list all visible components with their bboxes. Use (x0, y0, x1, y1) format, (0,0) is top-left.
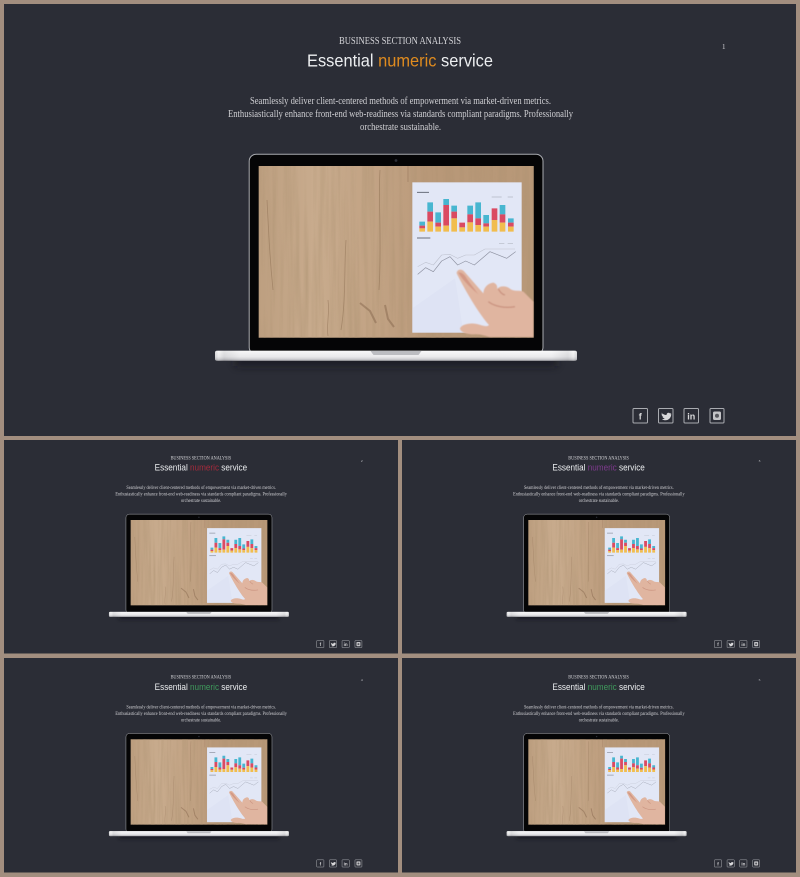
text block: description: orchestrate sustainable. (579, 718, 619, 723)
text block: description: Enthusiastically enhance front-end web-readiness via standards compliant paradigms. Professionally (115, 712, 287, 717)
heading: section label: BUSINESS SECTION ANALYSIS (568, 456, 629, 461)
text block: description (513, 705, 685, 723)
text block: description: Enthusiastically enhance front-end web-readiness via standards compliant paradigms. Professionally (115, 493, 287, 498)
bar chart (419, 199, 514, 232)
text block: description (115, 705, 287, 723)
page number: 3 (759, 459, 761, 463)
icon: linkedin: in (687, 412, 695, 422)
text block: description (115, 486, 287, 504)
page number: 1 (722, 43, 726, 51)
icon: twitter (658, 408, 673, 423)
panel: slide 2 (4, 440, 398, 654)
title: Essential numeric service (155, 463, 247, 473)
laptop mockup (109, 733, 289, 839)
text block: description: Enthusiastically enhance front-end web-readiness via standards compliant paradigms. Professionally (513, 712, 685, 717)
laptop mockup (507, 514, 687, 619)
camera (395, 159, 397, 162)
laptop base (215, 351, 577, 361)
laptop mockup (215, 154, 577, 366)
text block: description: Seamlessly deliver client-centered methods of empowerment via market-driven metrics. (524, 705, 674, 710)
heading: section label: BUSINESS SECTION ANALYSIS (171, 676, 231, 681)
text block: description: Seamlessly deliver client-centered methods of empowerment via market-driven metrics. (250, 96, 551, 107)
laptop shadow (235, 358, 557, 366)
social icons (317, 641, 362, 648)
hand pointing (457, 270, 533, 337)
social icons (714, 860, 760, 867)
page number: 2 (361, 459, 363, 463)
laptop mockup (507, 733, 687, 839)
social icons (633, 408, 724, 423)
heading: section label: BUSINESS SECTION ANALYSIS (339, 36, 461, 47)
slide 3 content (507, 456, 761, 648)
laptop screen: wood desk photo (259, 166, 534, 338)
heading: section label: BUSINESS SECTION ANALYSIS (568, 676, 629, 681)
text block: description: Enthusiastically enhance front-end web-readiness via standards compliant paradigms. Professionally (228, 109, 573, 120)
heading: section label: BUSINESS SECTION ANALYSIS (171, 456, 231, 461)
title: Essential numeric service (307, 51, 493, 71)
text block: description (513, 486, 685, 504)
page number: 4 (361, 678, 363, 682)
panel: slide 5 (402, 658, 796, 872)
text block: description: orchestrate sustainable. (181, 718, 221, 723)
text block: description (228, 96, 573, 133)
text block: description: orchestrate sustainable. (579, 499, 619, 504)
text block: description: Seamlessly deliver client-centered methods of empowerment via market-driven metrics. (524, 486, 674, 491)
panel: slide 3 (402, 440, 796, 654)
text block: description: orchestrate sustainable. (360, 122, 441, 133)
text block: description: orchestrate sustainable. (181, 499, 221, 504)
icon: facebook: f (639, 412, 643, 422)
panel: slide 4 (4, 658, 398, 872)
laptop bezel (249, 154, 543, 354)
chart titles (417, 192, 430, 238)
text block: description: Seamlessly deliver client-centered methods of empowerment via market-driven metrics. (126, 486, 276, 491)
laptop mockup (109, 514, 289, 619)
slide 2 content (109, 456, 363, 648)
title: Essential numeric service (552, 682, 645, 692)
text block: description: Seamlessly deliver client-centered methods of empowerment via market-driven metrics. (126, 705, 276, 710)
social icons (317, 860, 362, 867)
slide 4 content (109, 676, 363, 867)
panel: main slide (4, 4, 796, 436)
paper report (412, 182, 533, 337)
title: Essential numeric service (552, 463, 645, 473)
icon: instagram (710, 408, 724, 423)
text block: description: Enthusiastically enhance front-end web-readiness via standards compliant paradigms. Professionally (513, 493, 685, 498)
page number: 5 (759, 678, 761, 682)
slide 5 content (507, 676, 761, 867)
title: Essential numeric service (155, 682, 247, 692)
social icons (714, 641, 760, 648)
line chart (418, 249, 516, 274)
